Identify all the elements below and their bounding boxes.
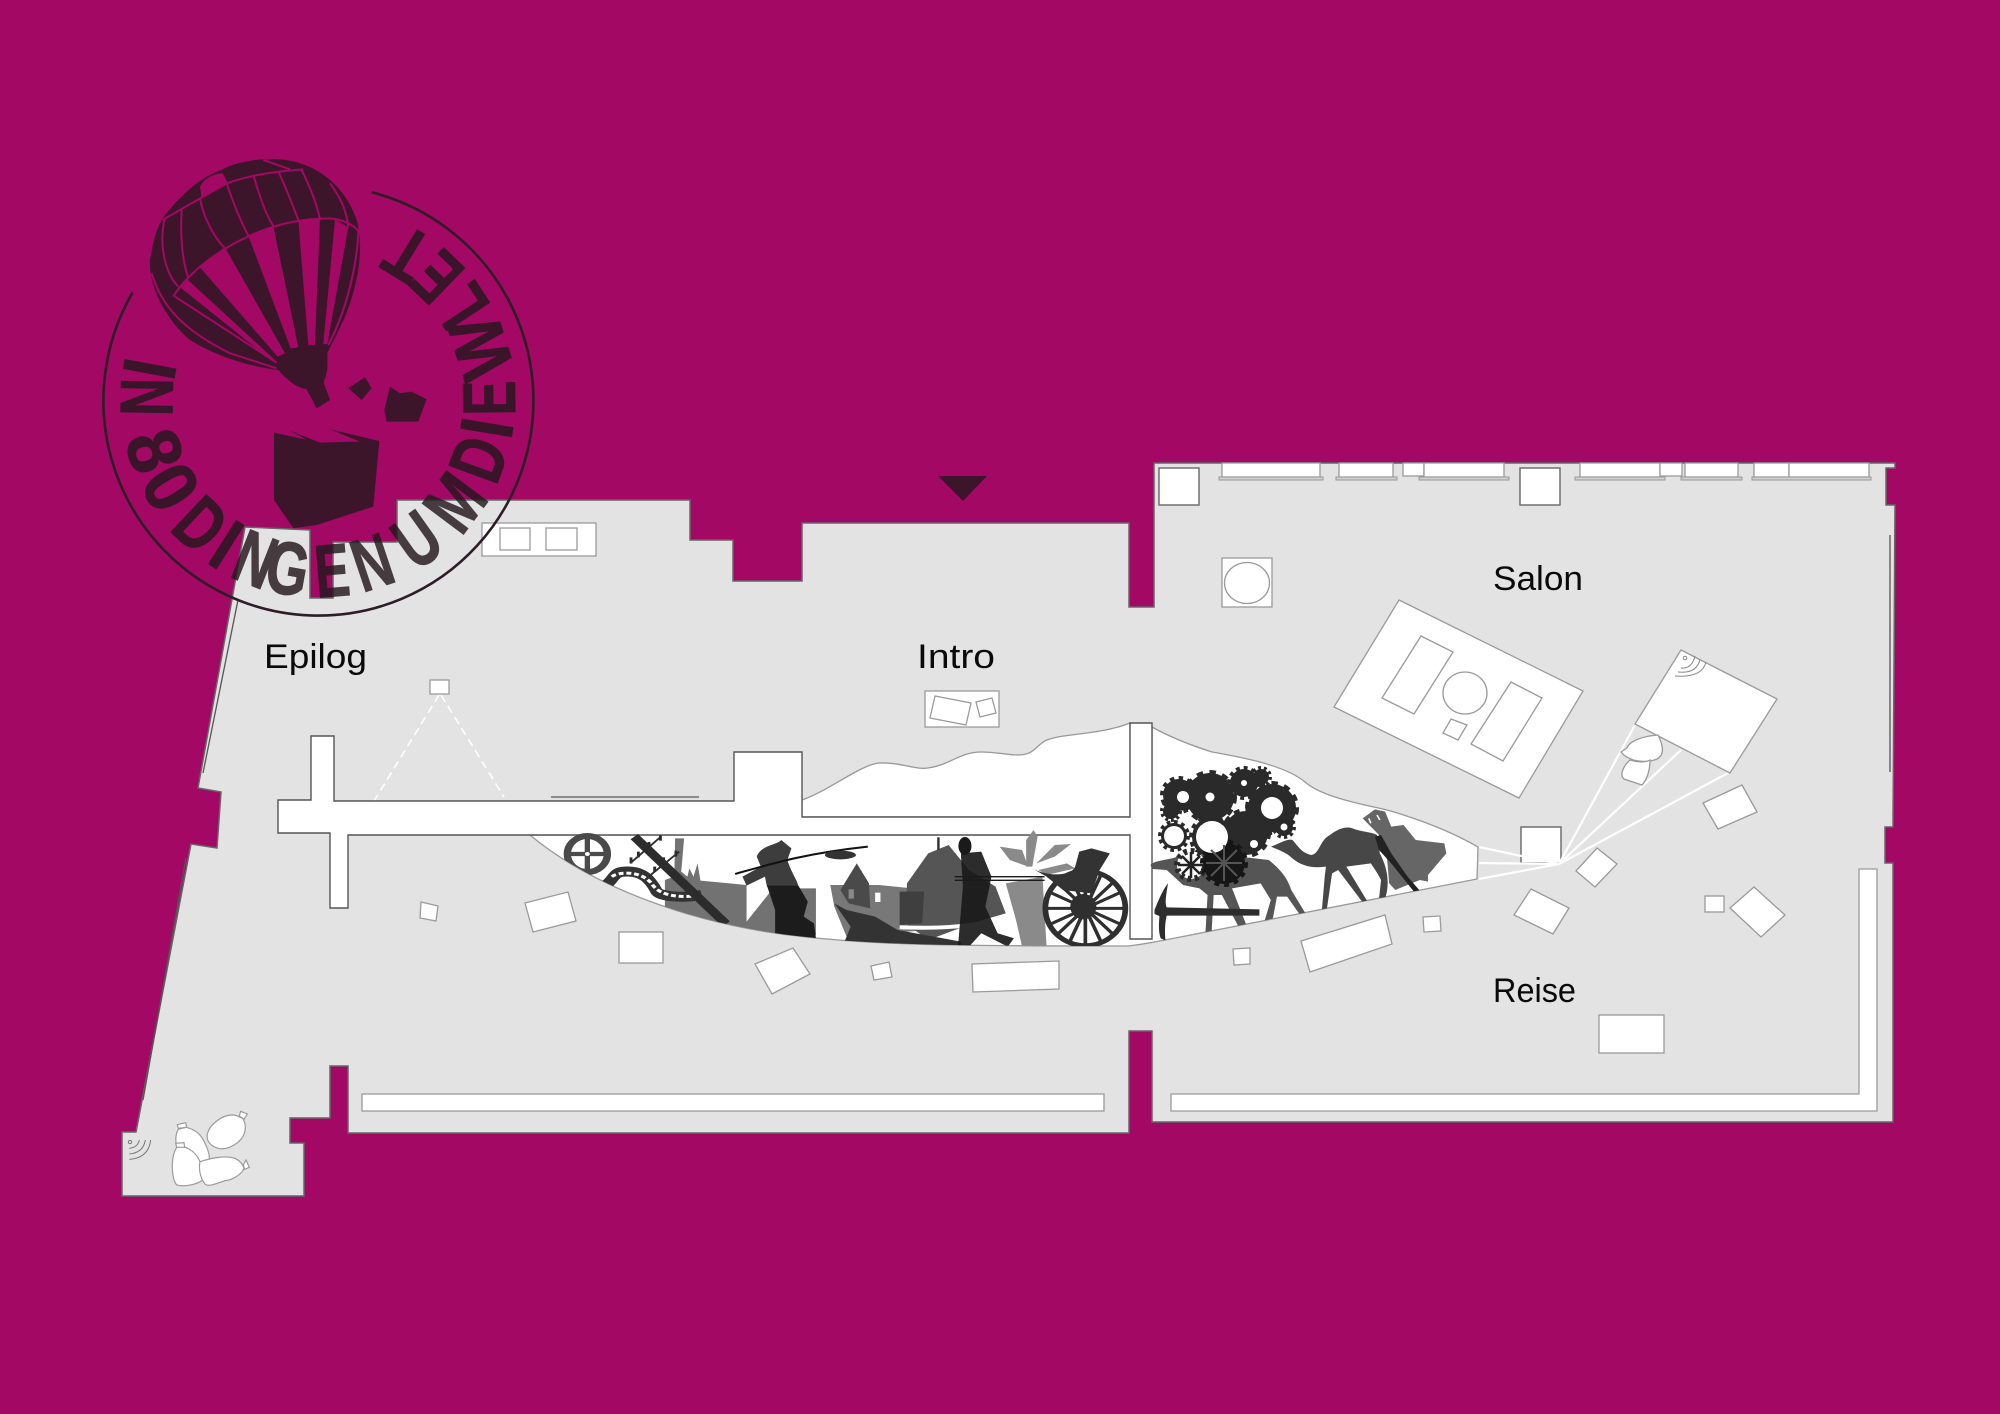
stamp text: W (432, 306, 530, 389)
flying book small (348, 377, 372, 400)
stamp text: T (371, 208, 445, 298)
icon: sound waves (128, 1140, 151, 1159)
stamp text: E (395, 234, 479, 320)
silhouette: film strip (600, 871, 702, 897)
silhouette: telegraph pole (630, 835, 726, 924)
silhouette: bell (1363, 809, 1446, 890)
exhibit plinths: epilog and intro (420, 892, 1059, 994)
silhouettes: right panel (1150, 809, 1446, 941)
stamp text: E (446, 380, 531, 416)
intro table (925, 691, 999, 727)
stamp text: I (444, 412, 530, 444)
stamp text: M (408, 458, 504, 548)
projection screen table (1635, 650, 1777, 773)
floor plan (122, 463, 1895, 1196)
chairs (1621, 735, 1662, 785)
silhouette: walking porter (735, 840, 868, 938)
exhibit plinths: reise (1233, 785, 1785, 1053)
stamp text: E (311, 527, 353, 614)
salon window benches (1219, 463, 1871, 480)
stamp: balloon logo (103, 159, 533, 616)
flying book medium (384, 387, 427, 422)
silhouettes: left panel (567, 830, 1126, 950)
wall shelf: reise (1171, 869, 1877, 1111)
salon big table (1334, 600, 1583, 798)
stamp text: 8 (108, 420, 199, 482)
hill wall panel (802, 723, 1130, 817)
room label: Reise: Reise (1493, 972, 1576, 1010)
silhouette: camel one (1150, 853, 1306, 932)
room label: Salon: Salon (1493, 560, 1583, 598)
stamp text: G (260, 524, 316, 613)
silhouette: rope (1375, 835, 1420, 891)
silhouette: palm tree (1000, 830, 1075, 947)
salon round showcase (1222, 558, 1272, 607)
curved wall panel (530, 727, 1478, 946)
stamp text: I (196, 504, 256, 585)
projection lines (1479, 725, 1728, 879)
entrance marker (938, 476, 987, 501)
stamp text: I (107, 352, 193, 385)
epilog projector (374, 680, 504, 801)
silhouette: boat and houses (830, 837, 1006, 950)
balloon (150, 159, 360, 408)
stamp text: 0 (124, 449, 216, 526)
silhouette: gears (1161, 769, 1296, 884)
silhouette: rickshaw (1032, 848, 1126, 947)
stamp text: L (417, 269, 505, 343)
stamp ring (103, 192, 533, 616)
silhouette: wheel (567, 836, 607, 872)
silhouette: camel two (1271, 827, 1388, 911)
stamp text (104, 208, 531, 614)
stamp text: D (433, 426, 526, 493)
wall lines (143, 535, 1890, 1100)
stamp text: N (104, 377, 190, 417)
central partition (278, 723, 1152, 939)
alcove table (482, 523, 596, 556)
bags corner (128, 1111, 249, 1186)
stamp text: N (222, 513, 288, 605)
icon: bags (172, 1111, 249, 1186)
silhouette: factory (665, 838, 816, 935)
stamp text: U (377, 494, 457, 585)
stamp text: D (156, 481, 243, 570)
wall shelf: intro (362, 1094, 1104, 1111)
salon pillars (1159, 468, 1561, 863)
room label: Intro: Intro (917, 638, 995, 676)
stamp text: N (341, 516, 404, 608)
silhouette: pickaxe (1154, 883, 1259, 941)
room label: Epilog: Epilog (264, 638, 367, 676)
flying book large (274, 429, 379, 528)
silhouette: walking man (955, 837, 1045, 947)
